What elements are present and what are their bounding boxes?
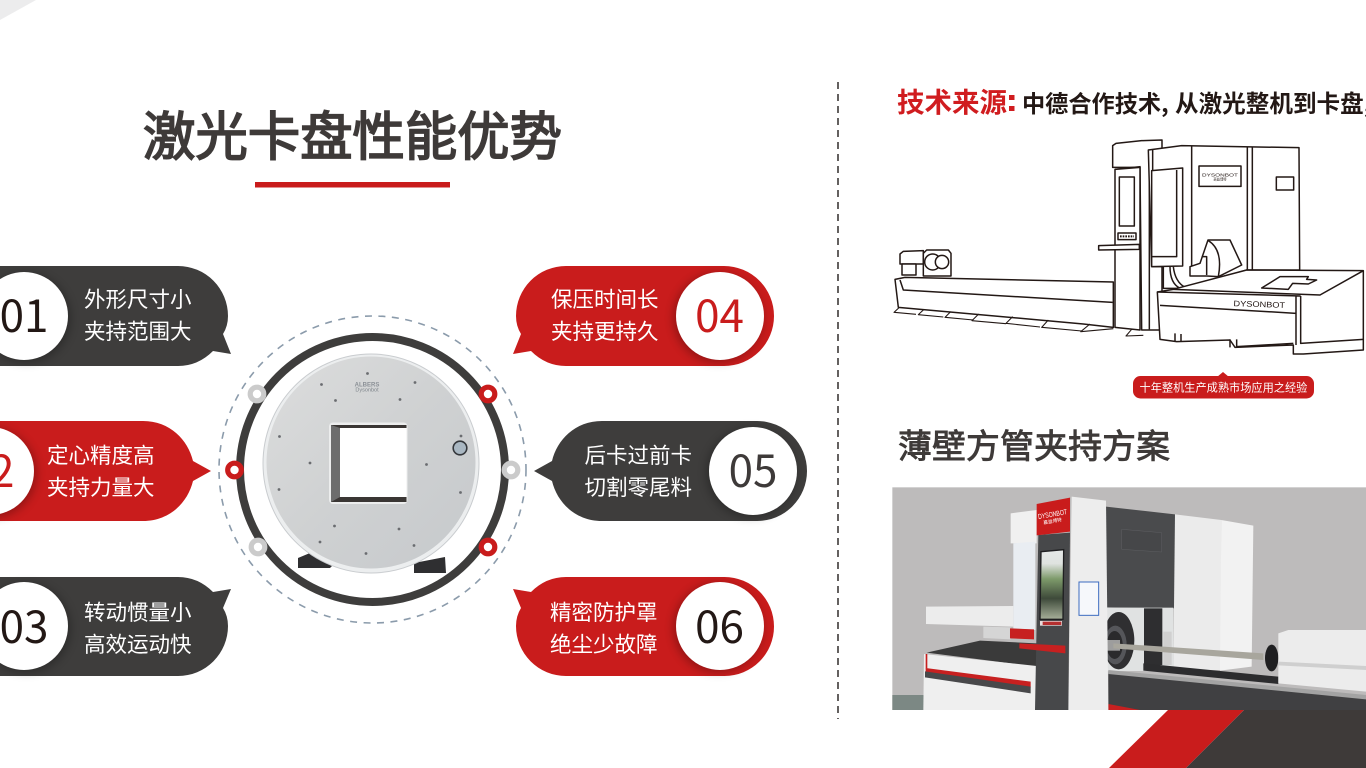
- panel: feature 01: [0, 266, 231, 366]
- chuck disc: [263, 354, 479, 573]
- central white column: [1068, 497, 1108, 710]
- chuck in machine: [1103, 612, 1134, 669]
- title: 激光卡盘性能优势: [143, 95, 562, 171]
- red brand panel: [1037, 498, 1070, 535]
- dark control column: [1035, 533, 1070, 710]
- panel: feature 03: 转动惯量小: [84, 596, 192, 627]
- red shelf: [1019, 643, 1065, 653]
- pressure gauge: [453, 441, 467, 455]
- control tower: [1099, 140, 1162, 330]
- panel: feature 05: [534, 421, 807, 521]
- panel: feature 02: [0, 421, 211, 521]
- rear chuck housing: [1265, 630, 1366, 692]
- panel: feature 04: 保压时间长: [551, 283, 659, 314]
- photo: tube laser cutting machine: [892, 487, 1366, 710]
- callout: ten years of experience: [1133, 372, 1314, 398]
- front table: [1157, 270, 1363, 354]
- panel: feature 03: 03: [0, 592, 48, 656]
- logo on enclosure: DYSONBOT: [1202, 172, 1238, 178]
- chuck disc: Dysonbot: [355, 388, 379, 394]
- panel: feature 04: [513, 266, 774, 366]
- operation label: [1079, 582, 1099, 615]
- control buttons: [1040, 621, 1062, 626]
- photo background: [892, 487, 1366, 710]
- rear chuck: [900, 250, 951, 276]
- panel: feature 05: 后卡过前卡: [584, 439, 692, 470]
- heading: thin wall square tube: 薄壁方管夹持方案: [898, 419, 1170, 468]
- logo on front table: DYSONBOT: [1233, 299, 1285, 310]
- heading: technology source: 中德合作技术,: [1022, 85, 1169, 119]
- panel: feature 01: 01: [0, 281, 48, 345]
- panel: feature 02: 定心精度高: [47, 439, 155, 470]
- bed support teeth: [894, 307, 1143, 336]
- panel: feature 04: 04: [695, 281, 744, 345]
- decorative corner triangle: [0, 0, 36, 20]
- panel: feature 03: 高效运动快: [84, 628, 192, 659]
- back tube bed: [895, 277, 1113, 327]
- panel: feature 04: 夹持更持久: [551, 315, 659, 346]
- red brand panel: 嘉益博特: [1043, 516, 1063, 526]
- panel: feature 03: [0, 577, 231, 676]
- panel: feature 01: 外形尺寸小: [84, 283, 192, 314]
- main enclosure: [1148, 146, 1300, 288]
- left loading section: [923, 510, 1037, 710]
- callout: ten years of experience: 十年整机生产成熟市场应用之经验: [1140, 380, 1307, 396]
- chuck mounting feet: [298, 553, 446, 573]
- red brand panel: DYSONBOT: [1037, 507, 1068, 521]
- main enclosure: 嘉益博特: [1213, 177, 1227, 182]
- panel: feature 06: 绝尘少故障: [550, 628, 658, 659]
- title underline: [255, 182, 450, 188]
- machine door right section: [1106, 507, 1253, 671]
- panel: feature 06: [513, 577, 774, 676]
- panel: feature 01: 夹持范围大: [84, 315, 192, 346]
- diagram: laser chuck with rings: [219, 316, 526, 623]
- panel: feature 06: 精密防护罩: [550, 596, 658, 627]
- touch screen: [1040, 550, 1064, 619]
- ring markers: [228, 387, 518, 554]
- right bed: [1108, 663, 1366, 710]
- heading: technology source: 从激光整机到卡盘,: [1175, 85, 1366, 119]
- line drawing: laser cutting machine: [894, 140, 1363, 354]
- dark inner ring: [240, 337, 505, 602]
- panel: feature 06: 06: [695, 592, 744, 656]
- tube: [1113, 643, 1263, 660]
- panel: feature 02: 夹持力量大: [47, 471, 155, 502]
- panel: feature 05: 切割零尾料: [584, 471, 692, 502]
- heading colon: [1009, 95, 1014, 111]
- heading: technology source: 技术来源: [897, 80, 1008, 120]
- bottom corner band: red: [1109, 710, 1244, 768]
- heading: technology source: [897, 80, 1366, 120]
- chuck logo: ALBERS: [355, 382, 379, 388]
- vertical dashed divider: [837, 82, 839, 719]
- panel: feature 05: 05: [729, 436, 777, 500]
- bottom corner band: dark: [1186, 710, 1366, 768]
- dashed outer ring: [219, 316, 526, 623]
